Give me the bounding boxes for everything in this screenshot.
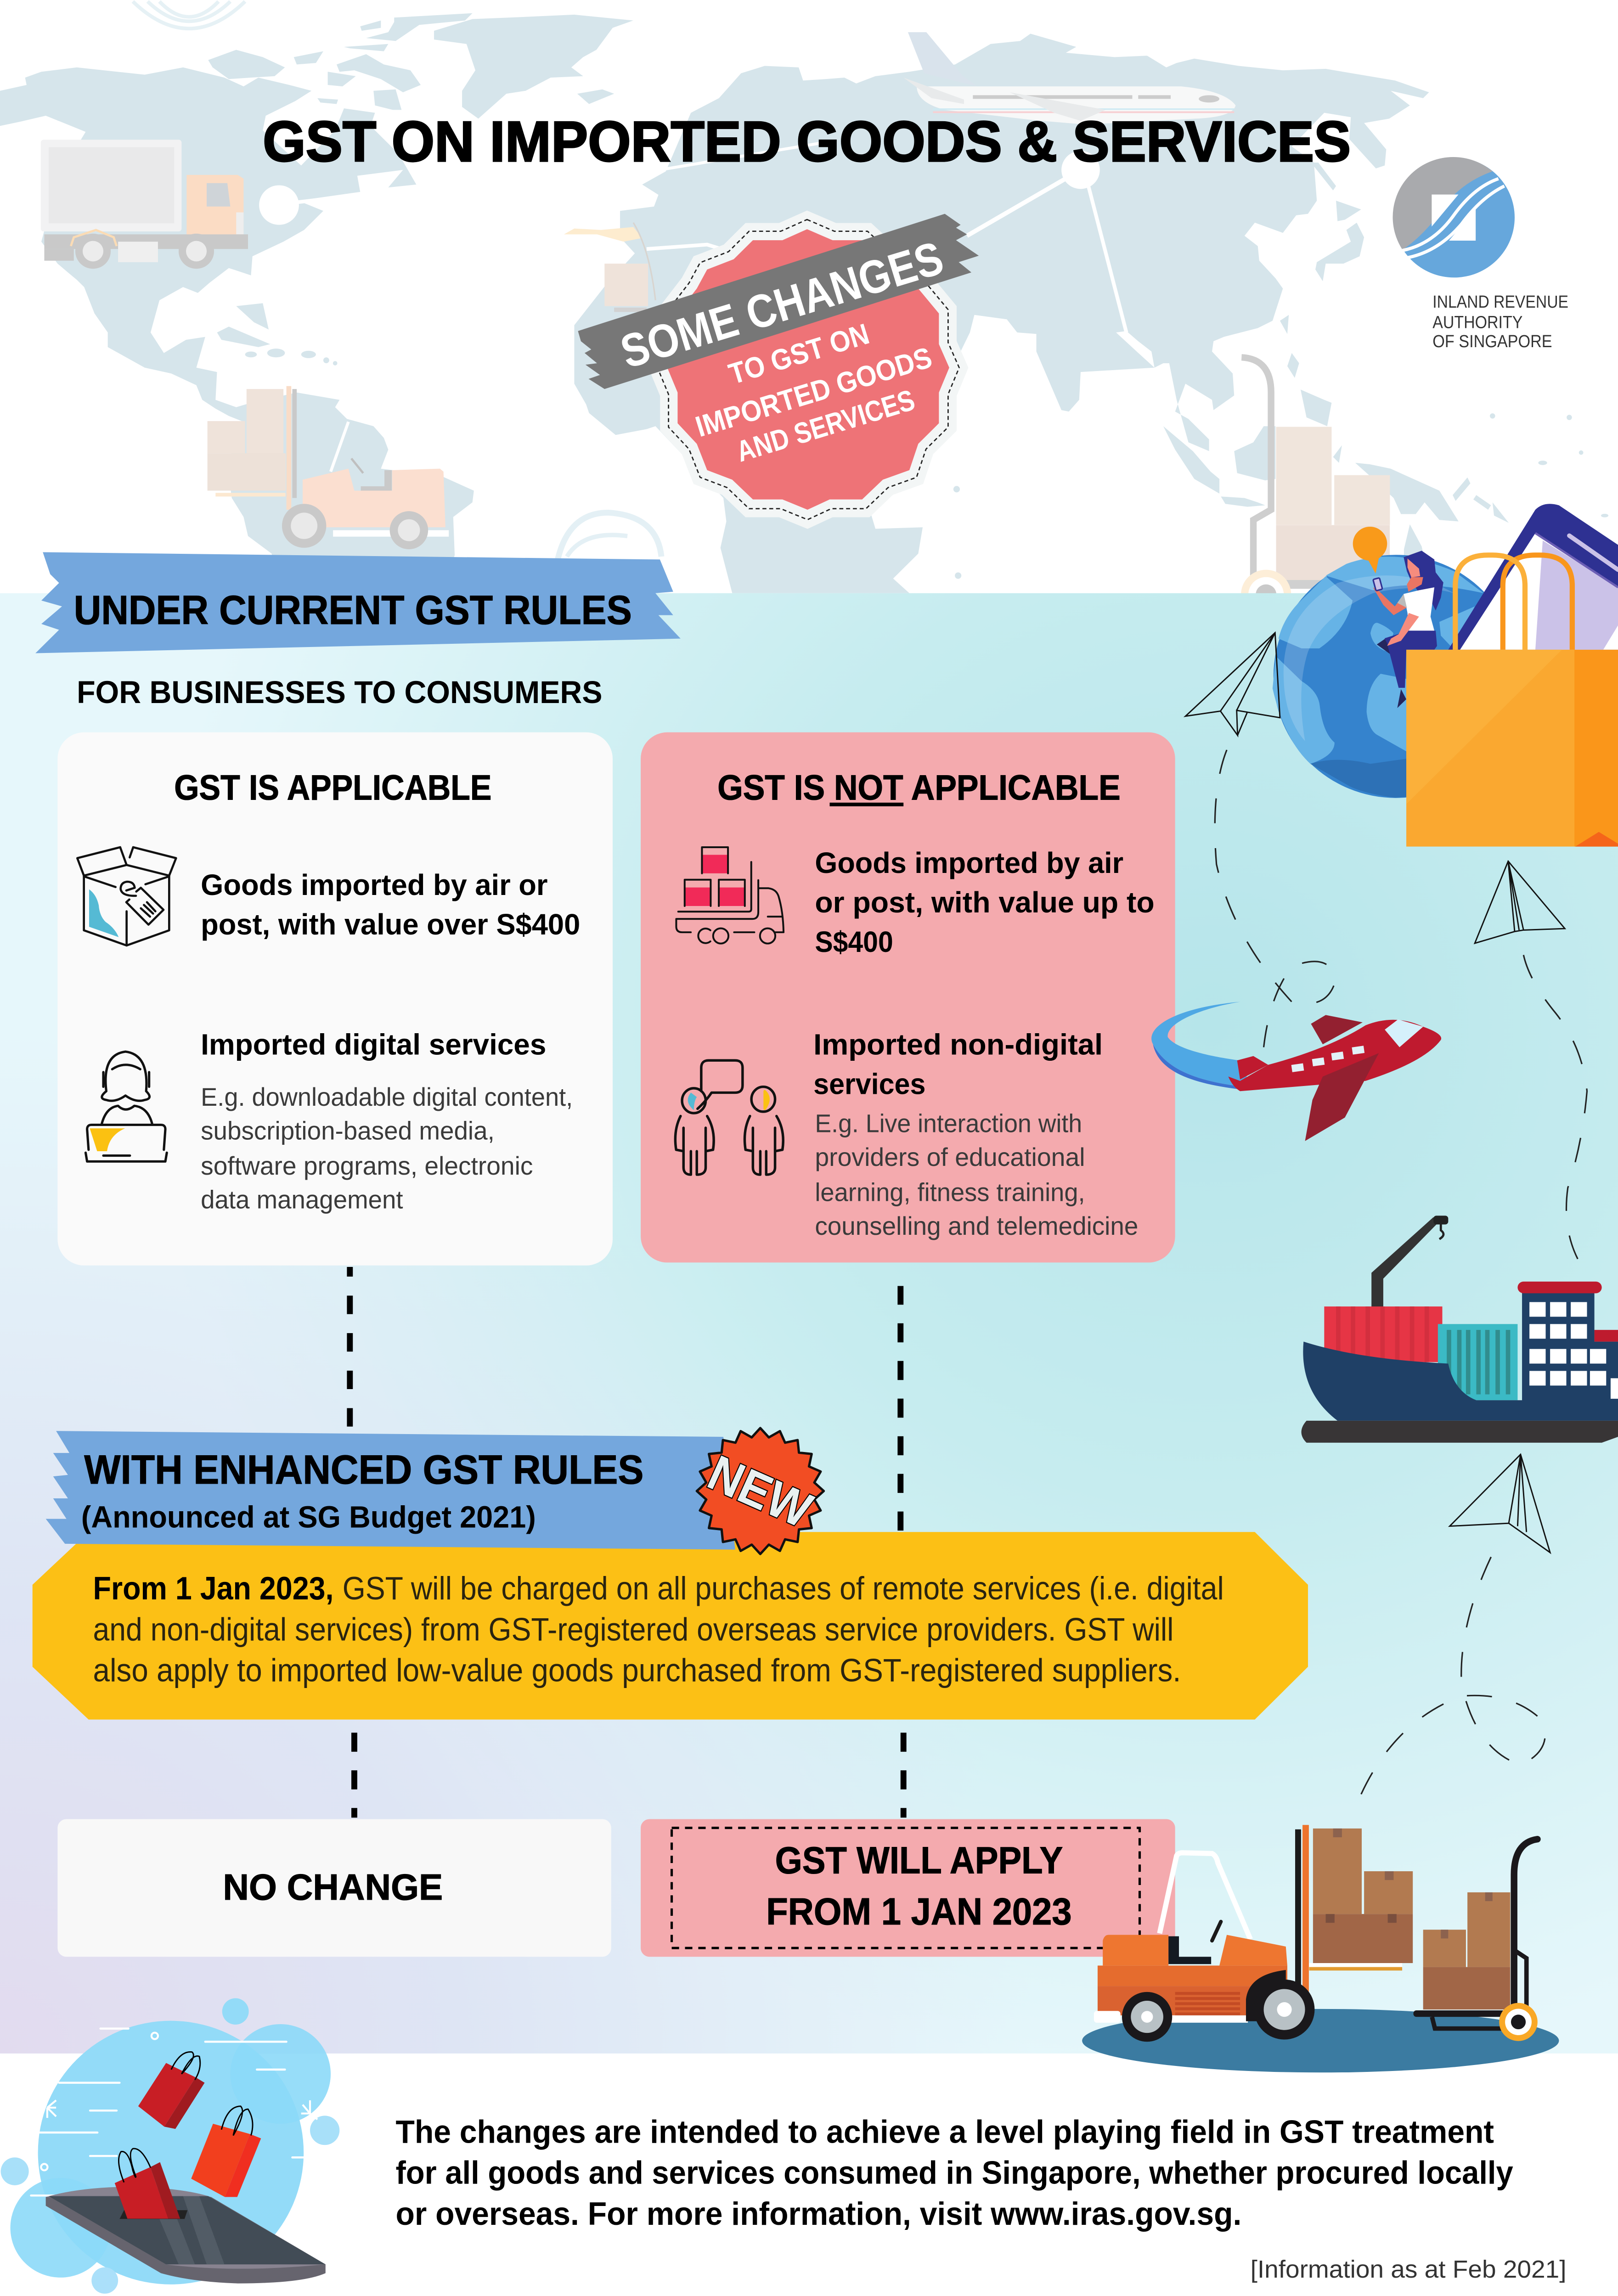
item text: digital services: software programs, electronic bbox=[201, 1151, 533, 1180]
dashed connector: left lower bbox=[353, 1733, 355, 1818]
map: white route lines and gaps bbox=[259, 142, 1127, 472]
faded truck bbox=[41, 140, 248, 269]
faded airplane bbox=[903, 32, 1235, 124]
callout: from 1 Jan 2023 bbox=[33, 1532, 1308, 1720]
dashed connector: left upper bbox=[349, 1267, 351, 1427]
faded boxes and flag bbox=[564, 223, 655, 312]
icon: person with headset and laptop bbox=[85, 1052, 167, 1161]
stamp: some changes badge: IMPORTED GOODS bbox=[692, 341, 936, 443]
panel heading: GST IS APPLICABLE bbox=[174, 768, 491, 807]
panel: no change bbox=[57, 1819, 611, 1957]
red airplane with blue swoosh bbox=[1151, 1002, 1441, 1141]
item text: non-digital services: E.g. Live interaction with bbox=[815, 1109, 1082, 1138]
item text: digital services: E.g. downloadable digital content, bbox=[201, 1082, 573, 1111]
forklift and hand truck scene bbox=[1082, 1825, 1559, 2072]
logo: Inland Revenue Authority of Singapore bbox=[1393, 157, 1568, 351]
stamp: some changes badge: TO GST ON bbox=[725, 317, 873, 391]
stamp: some changes badge bbox=[578, 210, 979, 529]
item text: goods up to S$400: or post, with value up to bbox=[815, 886, 1155, 919]
background: gradient section bbox=[0, 593, 1618, 2054]
callout: from 1 Jan 2023: also apply to imported low-value goods purchased from GST-registered suppliers. bbox=[93, 1652, 1181, 1688]
logo: Inland Revenue Authority of Singapore: OF SINGAPORE bbox=[1432, 332, 1552, 351]
closing statement bbox=[395, 2114, 1513, 2232]
globe with woman illustration bbox=[1273, 527, 1518, 798]
panel: GST will apply from 1 Jan 2023 bbox=[641, 1819, 1175, 1957]
item text: non-digital services bbox=[813, 1028, 1138, 1240]
callout: from 1 Jan 2023: GST will be charged on all purchases of remote services (i.e. digital bbox=[343, 1570, 1224, 1606]
shopping on phone illustration bbox=[1, 1998, 339, 2294]
item text: goods over S$400 bbox=[201, 868, 580, 941]
item text: digital services: Imported digital services bbox=[201, 1028, 546, 1061]
badge: new: NEW bbox=[700, 1445, 820, 1539]
item text: goods over S$400: post, with value over S$400 bbox=[201, 908, 580, 941]
title: GST ON IMPORTED GOODS & SERVICES bbox=[263, 110, 1351, 174]
item text: non-digital services: Imported non-digital bbox=[813, 1028, 1103, 1061]
banner: with enhanced GST rules: WITH ENHANCED GST RULES bbox=[84, 1446, 643, 1492]
paper plane 1 bbox=[1185, 633, 1280, 735]
faded forklift bbox=[208, 386, 449, 549]
dashed trail 2 bbox=[1523, 955, 1587, 1262]
dashed trail 1 bbox=[1215, 750, 1336, 1047]
callout: from 1 Jan 2023: From 1 Jan 2023, bbox=[93, 1570, 333, 1606]
subheading: for businesses to consumers: FOR BUSINESSES TO CONSUMERS bbox=[77, 675, 602, 710]
item text: non-digital services: services bbox=[813, 1068, 925, 1101]
banner: with enhanced GST rules bbox=[46, 1431, 735, 1550]
panel: GST will apply from 1 Jan 2023: GST WILL APPLY bbox=[775, 1839, 1063, 1881]
icon: open parcel box bbox=[77, 847, 176, 945]
closing statement: for all goods and services consumed in Singapore, whether procured locally bbox=[395, 2155, 1513, 2191]
date note: [Information as at Feb 2021] bbox=[1251, 2255, 1566, 2283]
panel: GST is applicable bbox=[57, 732, 613, 1266]
world map bbox=[0, 13, 1608, 593]
faded arc: bottom bbox=[553, 512, 661, 593]
stamp: some changes badge: SOME CHANGES bbox=[615, 231, 949, 378]
closing statement: or overseas. For more information, visit www.iras.gov.sg. bbox=[395, 2195, 1241, 2232]
panel: no change: NO CHANGE bbox=[223, 1867, 443, 1908]
item text: goods over S$400: Goods imported by air or bbox=[201, 868, 548, 901]
cargo ship bbox=[1302, 1216, 1618, 1443]
logo: Inland Revenue Authority of Singapore: INLAND REVENUE bbox=[1432, 292, 1568, 312]
panel: GST will apply from 1 Jan 2023: FROM 1 JAN 2023 bbox=[766, 1890, 1072, 1933]
paper plane 2 bbox=[1475, 861, 1565, 943]
logo: Inland Revenue Authority of Singapore: AUTHORITY bbox=[1432, 313, 1522, 332]
banner: under current GST rules: UNDER CURRENT GST RULES bbox=[74, 587, 632, 633]
dashed trail 3 bbox=[1361, 1557, 1545, 1794]
banner: under current GST rules bbox=[35, 552, 681, 653]
callout: from 1 Jan 2023: and non-digital services) from GST-registered overseas service providers. GST will bbox=[93, 1611, 1173, 1647]
item text: non-digital services: learning, fitness training, bbox=[815, 1178, 1085, 1206]
item text: non-digital services: counselling and telemedicine bbox=[815, 1211, 1138, 1240]
faded arc: top bbox=[133, 1, 245, 28]
panel heading: GST IS NOT APPLICABLE bbox=[717, 768, 1121, 807]
stamp: some changes badge: AND SERVICES bbox=[733, 383, 919, 468]
dashed connector: right lower bbox=[902, 1733, 904, 1818]
item text: goods up to S$400: Goods imported by air bbox=[815, 846, 1123, 879]
icon: delivery truck with crates bbox=[676, 847, 784, 944]
item text: goods up to S$400: S$400 bbox=[815, 925, 893, 958]
closing statement: The changes are intended to achieve a level playing field in GST treatment bbox=[395, 2114, 1494, 2150]
item text: digital services: data management bbox=[201, 1185, 403, 1214]
dashed connector: right upper bbox=[900, 1286, 902, 1531]
item text: goods up to S$400 bbox=[815, 846, 1155, 958]
shopping bag and phone bbox=[1406, 504, 1618, 847]
banner: with enhanced GST rules: (Announced at SG Budget 2021) bbox=[81, 1500, 536, 1535]
item text: digital services: subscription-based media, bbox=[201, 1116, 495, 1145]
faded hand trolley bbox=[1241, 357, 1390, 616]
panel: GST is not applicable bbox=[641, 732, 1175, 1262]
item text: non-digital services: providers of educational bbox=[815, 1142, 1085, 1171]
item text: digital services bbox=[201, 1028, 573, 1214]
icon: two people talking bbox=[675, 1060, 783, 1175]
paper plane 3 bbox=[1450, 1454, 1550, 1553]
